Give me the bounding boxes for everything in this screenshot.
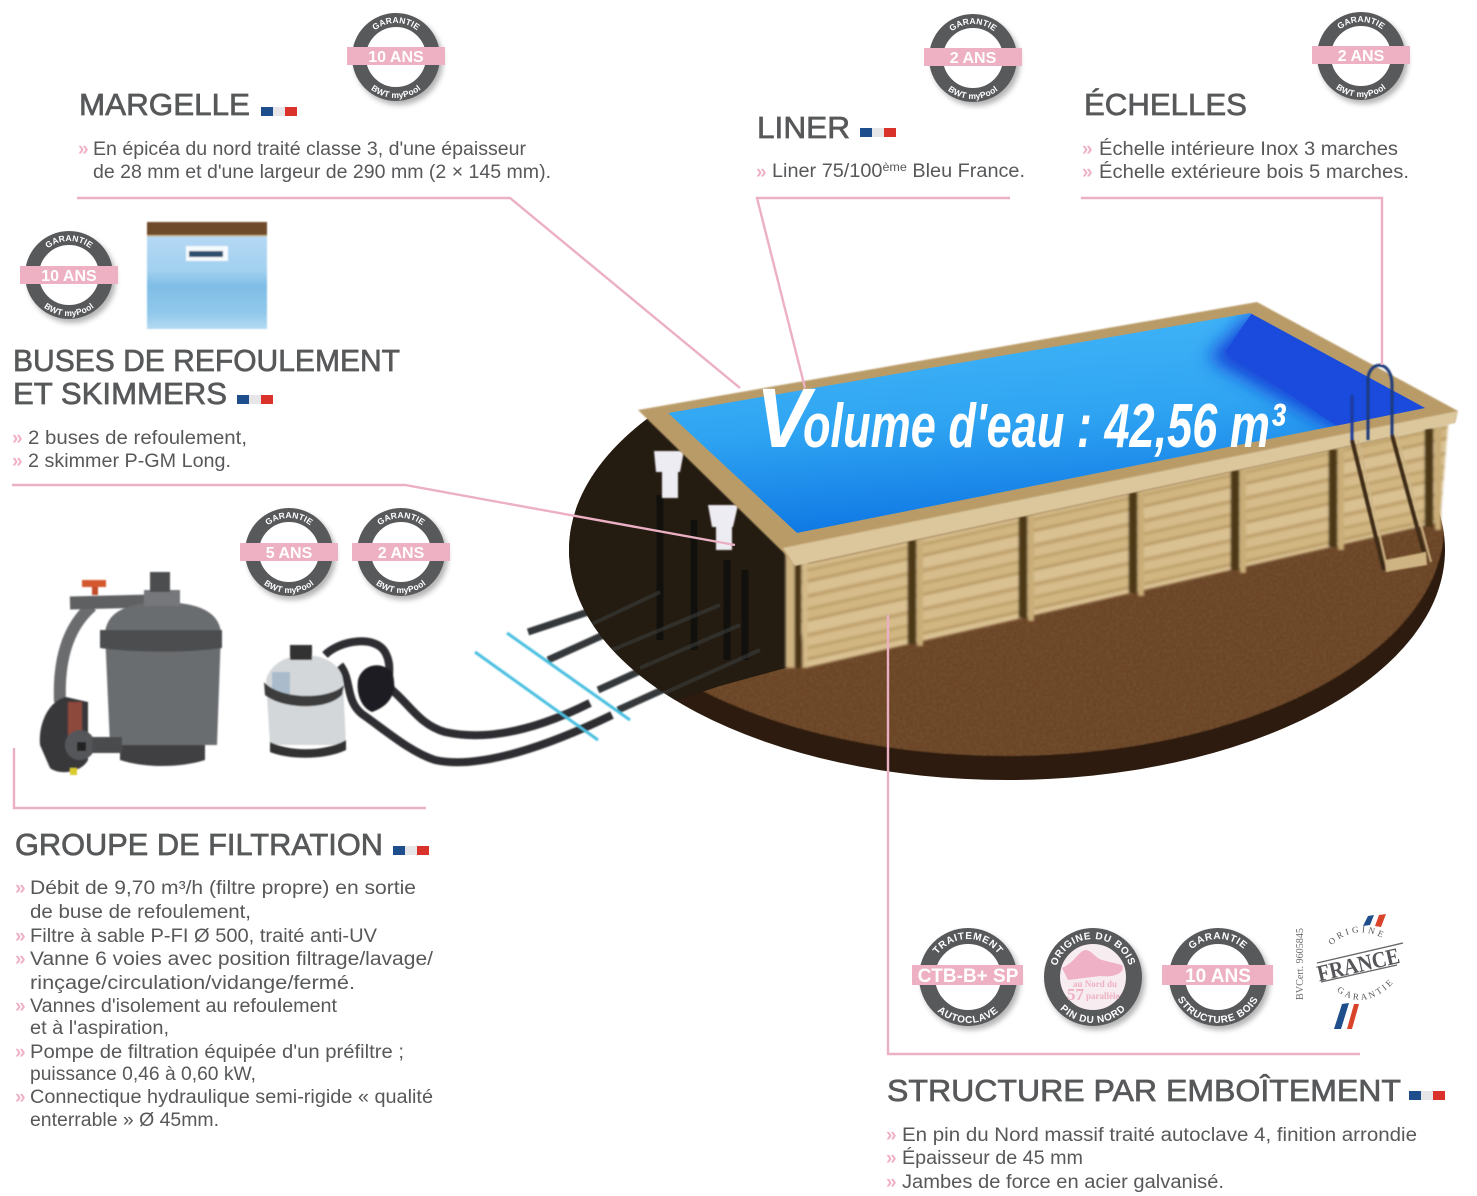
deck frame	[638, 302, 1458, 566]
text: filtration description: de buse de refoulement,	[30, 902, 251, 923]
panel: liner	[756, 110, 1025, 183]
text: au nord du 57e parallele: 57	[1067, 985, 1084, 1004]
badge: garantie 2 ans echelles: GARANTIE	[1338, 16, 1385, 30]
text: au nord du 57e parallele: parallèle	[1086, 991, 1120, 1001]
heading: buses et skimmers: BUSES DE REFOULEMENT	[13, 343, 400, 378]
text: filtration description: »	[15, 1087, 26, 1108]
heading: structure: STRUCTURE PAR EMBOÎTEMENT	[887, 1073, 1401, 1108]
badge: garantie 10 ans buses	[20, 231, 119, 326]
label: water volume: V	[756, 371, 816, 465]
badge: garantie 10 ans buses: 10 ANS	[41, 268, 97, 285]
badge: garantie 2 ans echelles	[1312, 12, 1411, 107]
text: structure description	[886, 1125, 1417, 1193]
leader line: buses	[12, 485, 735, 545]
badge: garantie 2 ans filtration: 2 ANS	[378, 545, 425, 562]
buried pipes and blue trench lines	[475, 608, 680, 740]
text: filtration description: et à l'aspiration,	[30, 1018, 169, 1039]
badge: garantie 2 ans liner: 2 ANS	[950, 50, 997, 67]
panel: structure par emboitement	[886, 1073, 1445, 1193]
text: filtration description: »	[15, 926, 26, 947]
badge: origine du bois pin du nord	[1044, 928, 1148, 1033]
badge: garantie 2 ans echelles: 2 ANS	[1338, 48, 1385, 65]
badge: garantie 2 ans filtration: BWT myPool	[376, 580, 426, 595]
badge: garantie 10 ans structure bois: GARANTIE	[1189, 932, 1248, 949]
text: margelle description: »	[78, 139, 89, 160]
heading: echelles: ÉCHELLES	[1084, 87, 1247, 122]
heading: buses et skimmers: ET SKIMMERS	[13, 376, 227, 411]
text: au nord du 57e parallele	[1067, 979, 1120, 1004]
text: buses description	[12, 428, 247, 472]
text: margelle description	[78, 139, 551, 183]
label: water volume: olume d'eau : 42,56 m³	[803, 392, 1286, 461]
text: liner description: Bleu France.	[907, 161, 1025, 182]
text: echelles description: Échelle intérieure Inox 3 marches	[1099, 139, 1398, 160]
text: echelles description: »	[1082, 162, 1093, 183]
leader line: echelles	[1081, 198, 1382, 365]
leader line: filtration	[14, 748, 426, 808]
logo: origine france garantie: GARANTIE	[1338, 980, 1393, 1000]
badge: garantie 2 ans filtration	[352, 508, 451, 603]
panel: buses et skimmers	[12, 343, 400, 472]
ground disc	[569, 418, 1445, 780]
text: filtration description: »	[15, 949, 26, 970]
flag stripes top	[1363, 914, 1386, 927]
text: filtration description: »	[15, 1042, 26, 1063]
badge: garantie 10 ans margelle	[347, 13, 446, 108]
heading: groupe de filtration: GROUPE DE FILTRATION	[15, 827, 383, 862]
text: liner description: »	[756, 162, 767, 183]
heading: margelle: MARGELLE	[79, 87, 250, 122]
leader line: liner	[757, 198, 1010, 388]
text: structure description: »	[886, 1148, 897, 1169]
badge: garantie 10 ans structure bois	[1162, 928, 1273, 1033]
illustration: pool and ground	[560, 290, 1460, 790]
badge: garantie 5 ans filtration: GARANTIE	[266, 512, 313, 526]
water surface	[668, 313, 1430, 533]
badge: garantie 10 ans margelle: BWT myPool	[371, 84, 421, 100]
badge: garantie 10 ans buses: BWT myPool	[44, 302, 94, 318]
badge: origine du bois pin du nord: ORIGINE DU BOIS	[1051, 932, 1135, 965]
certification number: BVCert. 9605845	[1295, 928, 1306, 1000]
photo: skimmer in pool	[147, 222, 267, 329]
text: structure description: »	[886, 1125, 897, 1146]
icon: french flag	[860, 128, 896, 137]
text: filtration description: Filtre à sable P-FI Ø 500, traité anti-UV	[30, 926, 377, 947]
text: buses description: »	[12, 451, 23, 472]
badge: garantie 10 ans buses: GARANTIE	[46, 235, 93, 248]
text: margelle description: En épicéa du nord traité classe 3, d'une épaisseur	[93, 139, 527, 160]
text: buses description: »	[12, 428, 23, 449]
ground brown surface	[570, 418, 1444, 757]
illustration: large sand filter with pump	[40, 572, 222, 775]
panel: groupe de filtration	[15, 827, 434, 1131]
text: buses description: 2 buses de refoulement,	[28, 428, 247, 449]
text: margelle description: de 28 mm et d'une largeur de 290 mm (2 × 145 mm).	[93, 162, 551, 183]
text: filtration description: Débit de 9,70 m³/h (filtre propre) en sortie	[30, 878, 416, 899]
text: filtration description: rinçage/circulation/vidange/fermé.	[30, 973, 355, 994]
text: echelles description: Échelle extérieure bois 5 marches.	[1099, 162, 1409, 183]
badge: traitement CTB-B+ SP autoclave: CTB-B+ SP	[918, 966, 1019, 987]
illustration: small filter with hoses	[264, 641, 612, 762]
badge: garantie 10 ans structure bois: 10 ANS	[1185, 966, 1251, 987]
text: liner description	[756, 160, 1025, 183]
text: filtration description: puissance 0,46 à 0,60 kW,	[30, 1064, 256, 1085]
badge: garantie 10 ans margelle: GARANTIE	[372, 17, 420, 30]
badge: garantie 5 ans filtration: 5 ANS	[266, 545, 313, 562]
text: structure description: Jambes de force en acier galvanisé.	[902, 1172, 1224, 1193]
text: liner description: Liner 75/100	[772, 161, 878, 182]
badge: garantie 2 ans echelles: BWT myPool	[1336, 84, 1386, 99]
badge: garantie 2 ans liner: BWT myPool	[948, 86, 998, 101]
wall posts	[912, 428, 1429, 644]
logo rules	[1317, 943, 1403, 982]
icon: french flag	[393, 846, 429, 855]
logo word: garantie	[1333, 978, 1398, 1000]
text: filtration description	[15, 878, 434, 1131]
logo: origine france garantie: ORIGINE	[1328, 926, 1384, 944]
ground disc dark rim	[569, 418, 1445, 780]
text: filtration description: enterrable » Ø 45mm.	[30, 1110, 219, 1131]
text: structure description: En pin du Nord massif traité autoclave 4, finition arrondie	[902, 1125, 1417, 1146]
text: filtration description: Connectique hydraulique semi-rigide « qualité	[30, 1087, 433, 1108]
wooden wall	[790, 424, 1448, 668]
logo: origine france garantie	[1315, 914, 1404, 1029]
text: echelles description: »	[1082, 139, 1093, 160]
badge: traitement CTB-B+ SP autoclave	[912, 928, 1023, 1033]
text: au nord du 57e parallele: au Nord du	[1073, 979, 1117, 989]
text: liner description: ème	[882, 160, 907, 174]
badge: traitement CTB-B+ SP autoclave: TRAITEMENT	[932, 932, 1004, 953]
text: buses description: 2 skimmer P-GM Long.	[28, 451, 231, 472]
heading: buses et skimmers	[13, 343, 400, 411]
icon: french flag	[1409, 1091, 1445, 1100]
text: echelles description	[1082, 139, 1409, 183]
skimmers	[654, 451, 738, 550]
badge: garantie 10 ans margelle: 10 ANS	[368, 49, 424, 66]
text: structure description: »	[886, 1172, 897, 1193]
heading: liner: LINER	[757, 110, 850, 145]
badge: garantie 2 ans liner: GARANTIE	[950, 18, 997, 32]
leader line: structure	[888, 615, 1360, 1054]
text: filtration description: »	[15, 878, 26, 899]
badge: garantie 10 ans structure bois: STRUCTURE BOIS	[1178, 996, 1258, 1023]
text: filtration description: Vanne 6 voies avec position filtrage/lavage/	[30, 949, 434, 970]
icon: french flag	[237, 395, 273, 404]
text: filtration description: »	[15, 996, 26, 1017]
text: filtration description: Vannes d'isolement au refoulement	[30, 996, 338, 1017]
badge: traitement CTB-B+ SP autoclave: AUTOCLAVE	[937, 1006, 998, 1024]
badge: garantie 5 ans filtration: BWT myPool	[264, 580, 314, 595]
panel: echelles	[1082, 87, 1409, 183]
flag stripes bottom	[1334, 1003, 1359, 1029]
text: filtration description: Pompe de filtration équipée d'un préfiltre ;	[30, 1042, 404, 1063]
icon: french flag	[261, 107, 297, 116]
leader line: margelle	[77, 198, 740, 388]
icon: pink map of northern hemisphere	[1062, 950, 1123, 980]
panel: margelle	[78, 87, 551, 183]
badge: garantie 5 ans filtration	[240, 508, 339, 603]
badge: garantie 2 ans filtration: GARANTIE	[378, 512, 425, 526]
logo word: origine	[1326, 932, 1392, 952]
ladder	[1352, 365, 1431, 572]
dark excavated wall at left	[569, 418, 790, 700]
badge: origine du bois pin du nord: PIN DU NORD	[1060, 1004, 1124, 1023]
label: water volume	[756, 371, 1286, 465]
badge: garantie 2 ans liner	[924, 14, 1023, 109]
logo word: france: FRANCE	[1315, 943, 1402, 986]
text: structure description: Épaisseur de 45 mm	[902, 1148, 1083, 1169]
